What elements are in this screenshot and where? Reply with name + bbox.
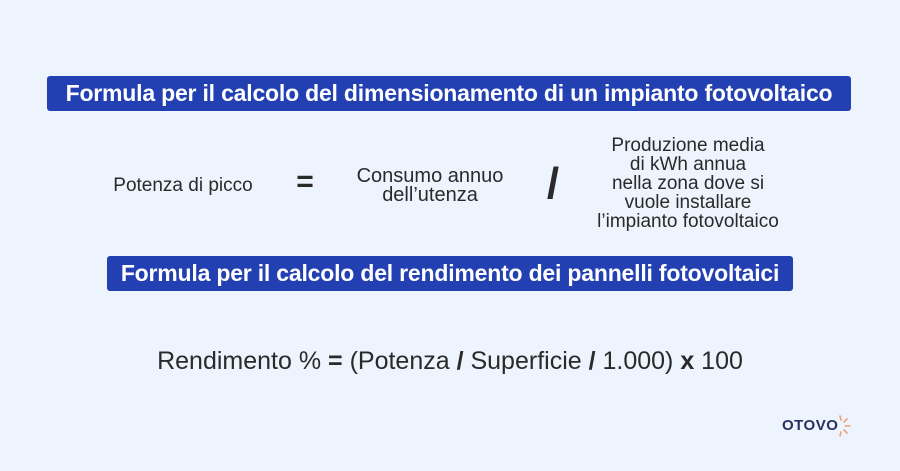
text: produzione media: di kWh annua [630,154,746,175]
title: formula 1: Formula per il calcolo del dimensionamento di un impianto fotovoltaico [66,80,832,106]
logo: otovo: OTOVO [782,417,838,434]
text: consumo annuo: dell’utenza [382,184,478,206]
text: produzione media: nella zona dove si [612,173,764,194]
text: consumo annuo: Consumo annuo [357,165,503,187]
formula: rendimento: Rendimento % = (Potenza / Superficie / 1.000) x 100 [157,347,743,375]
text: produzione media [597,135,779,232]
equals sign: = [296,165,314,198]
logo: otovo [782,415,851,437]
text: produzione media: vuole installare [625,192,751,213]
text: produzione media: Produzione media [611,135,765,156]
text: potenza di picco: Potenza di picco [113,175,253,196]
slash: / [547,159,559,208]
title: formula 2: Formula per il calcolo del rendimento dei pannelli fotovoltaici [121,260,779,286]
text: consumo annuo [357,165,503,206]
text: produzione media: l’impianto fotovoltaico [597,211,779,232]
